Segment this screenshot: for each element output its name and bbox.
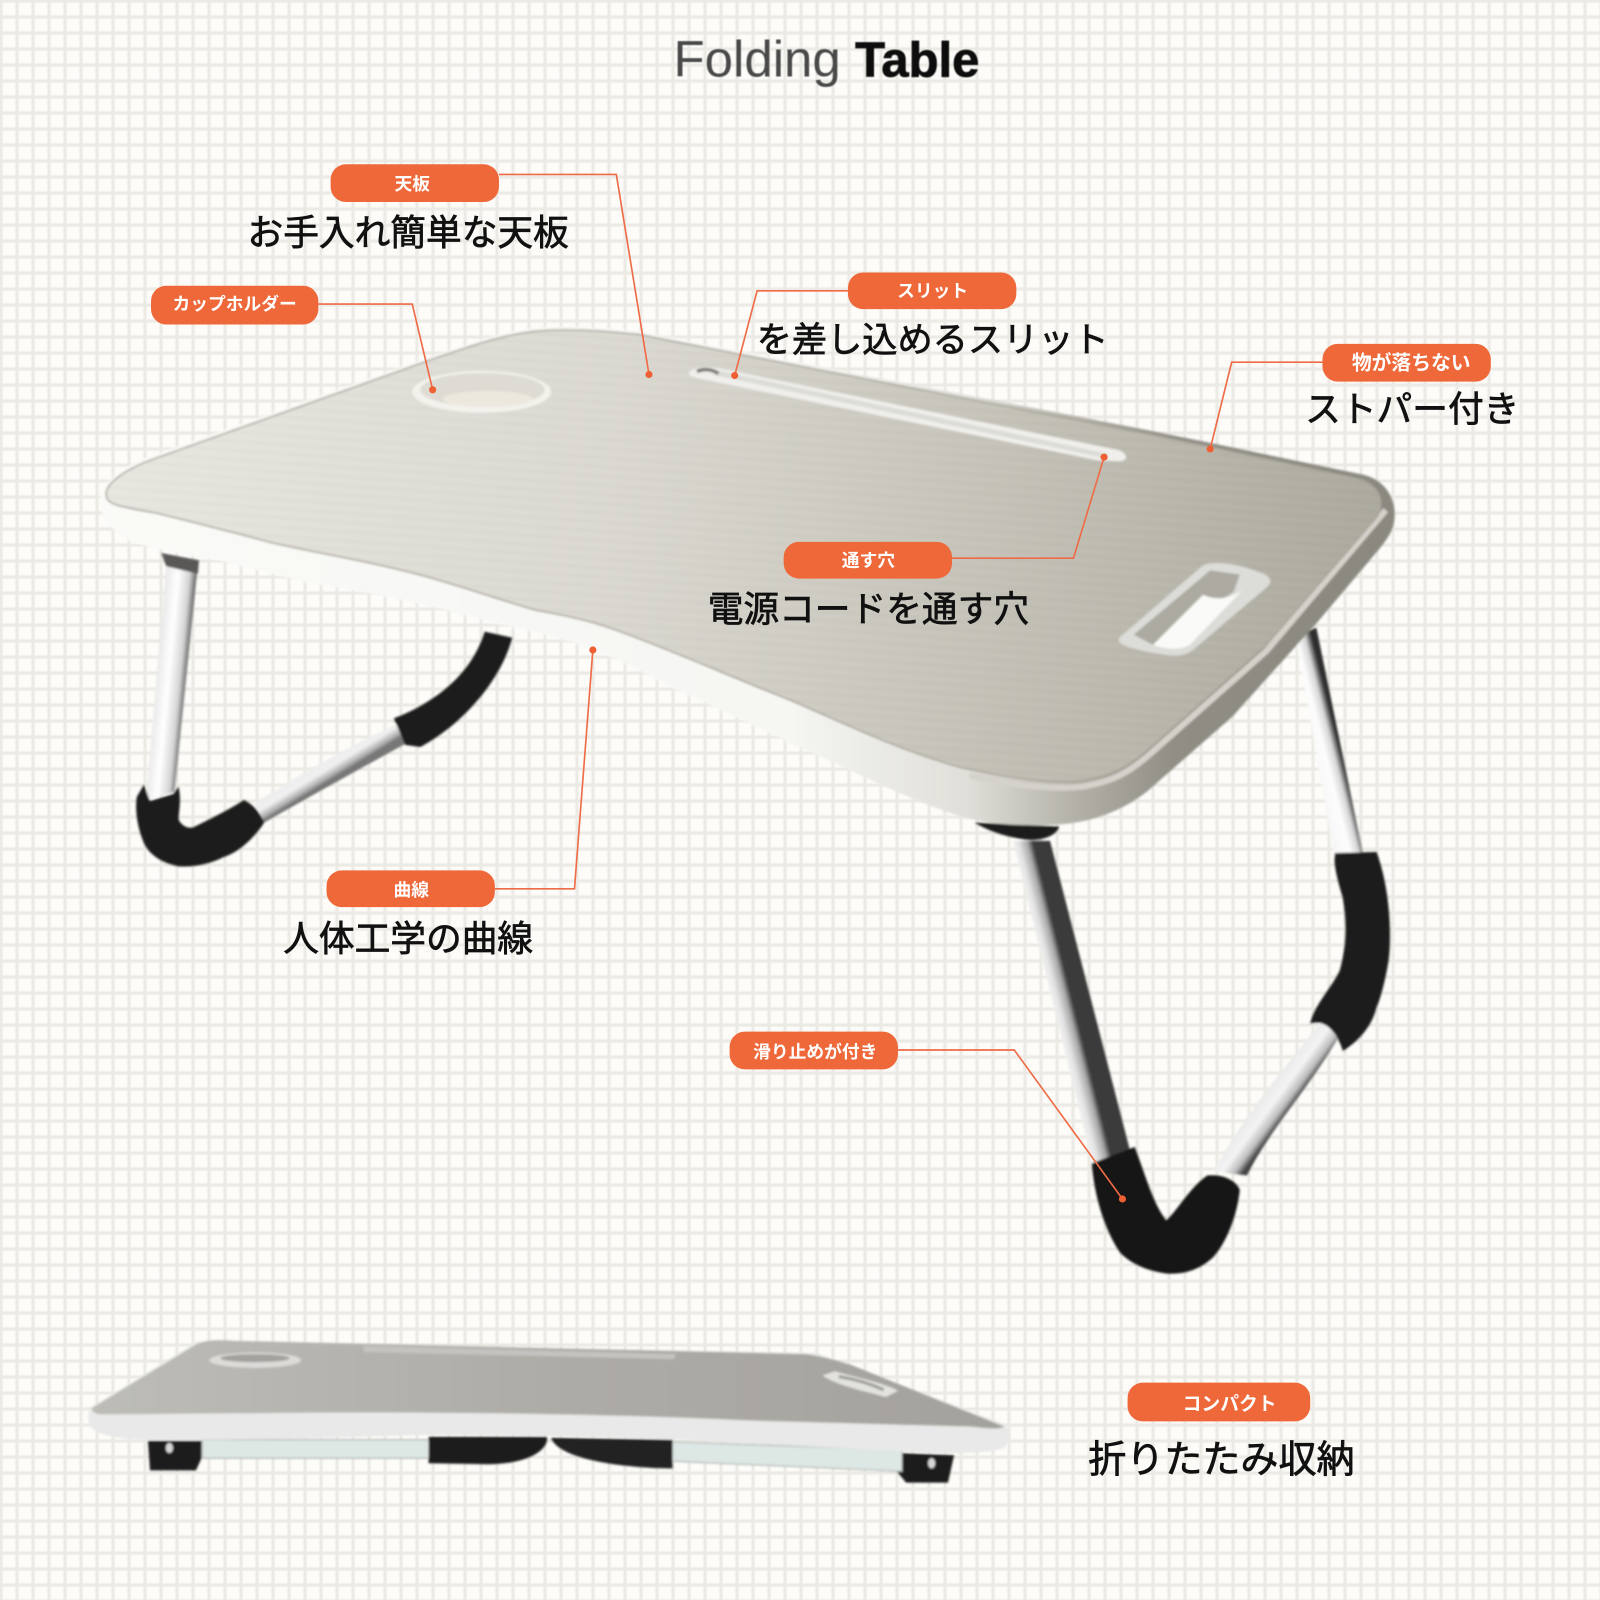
folded top surface [92, 1340, 1004, 1428]
callout: compact: コンパクト [1183, 1393, 1277, 1414]
callout: ergonomic curve: 曲線 [393, 880, 429, 900]
callout: cable hole: 電源コードを通す穴 [708, 589, 1029, 629]
table top wood surface [106, 330, 1381, 781]
title: Table [855, 34, 979, 88]
folded cup holder [209, 1353, 301, 1368]
callout: slit [731, 272, 1109, 379]
callout: slit: スリット [897, 281, 968, 301]
callout: top board: お手入れ簡単な天板 [247, 213, 569, 253]
title: Folding [673, 31, 841, 88]
callout: ergonomic curve: 人体工学の曲線 [283, 919, 533, 959]
rear left leg [136, 553, 512, 867]
cup holder [412, 371, 551, 413]
callout: top board: 天板 [394, 174, 430, 194]
wood grain [106, 330, 1381, 781]
callout: cable hole [708, 454, 1108, 629]
compact folded table [88, 1340, 1010, 1483]
folded handle [822, 1371, 898, 1397]
folded slit [363, 1346, 676, 1359]
table top rim [100, 327, 1395, 825]
callout: stopper: 物が落ちない [1352, 351, 1471, 374]
callout: compact: 折りたたみ収納 [1088, 1439, 1355, 1481]
carry handle [1119, 563, 1270, 656]
callout: compact [1088, 1383, 1355, 1481]
folding table illustration [100, 327, 1395, 1274]
light lip of the rim [969, 510, 1386, 788]
callout: stopper: ストパー付き [1305, 389, 1519, 429]
folded top rim [88, 1342, 1010, 1453]
callout: stopper [1207, 344, 1519, 453]
callout: anti-slip [730, 1032, 1126, 1203]
callout: cup holder: カップホルダー [173, 293, 297, 314]
callout: cup holder [151, 286, 436, 393]
callout: cable hole: 通す穴 [842, 550, 895, 570]
folded legs [148, 1437, 954, 1483]
callout: slit: を差し込めるスリット [757, 321, 1109, 360]
cable slit [689, 367, 1126, 461]
callout: anti-slip: 滑り止めが付き [753, 1041, 877, 1062]
front right leg [974, 628, 1390, 1274]
callout: ergonomic curve [283, 646, 596, 959]
title [673, 31, 979, 88]
callout: top board [247, 164, 653, 378]
